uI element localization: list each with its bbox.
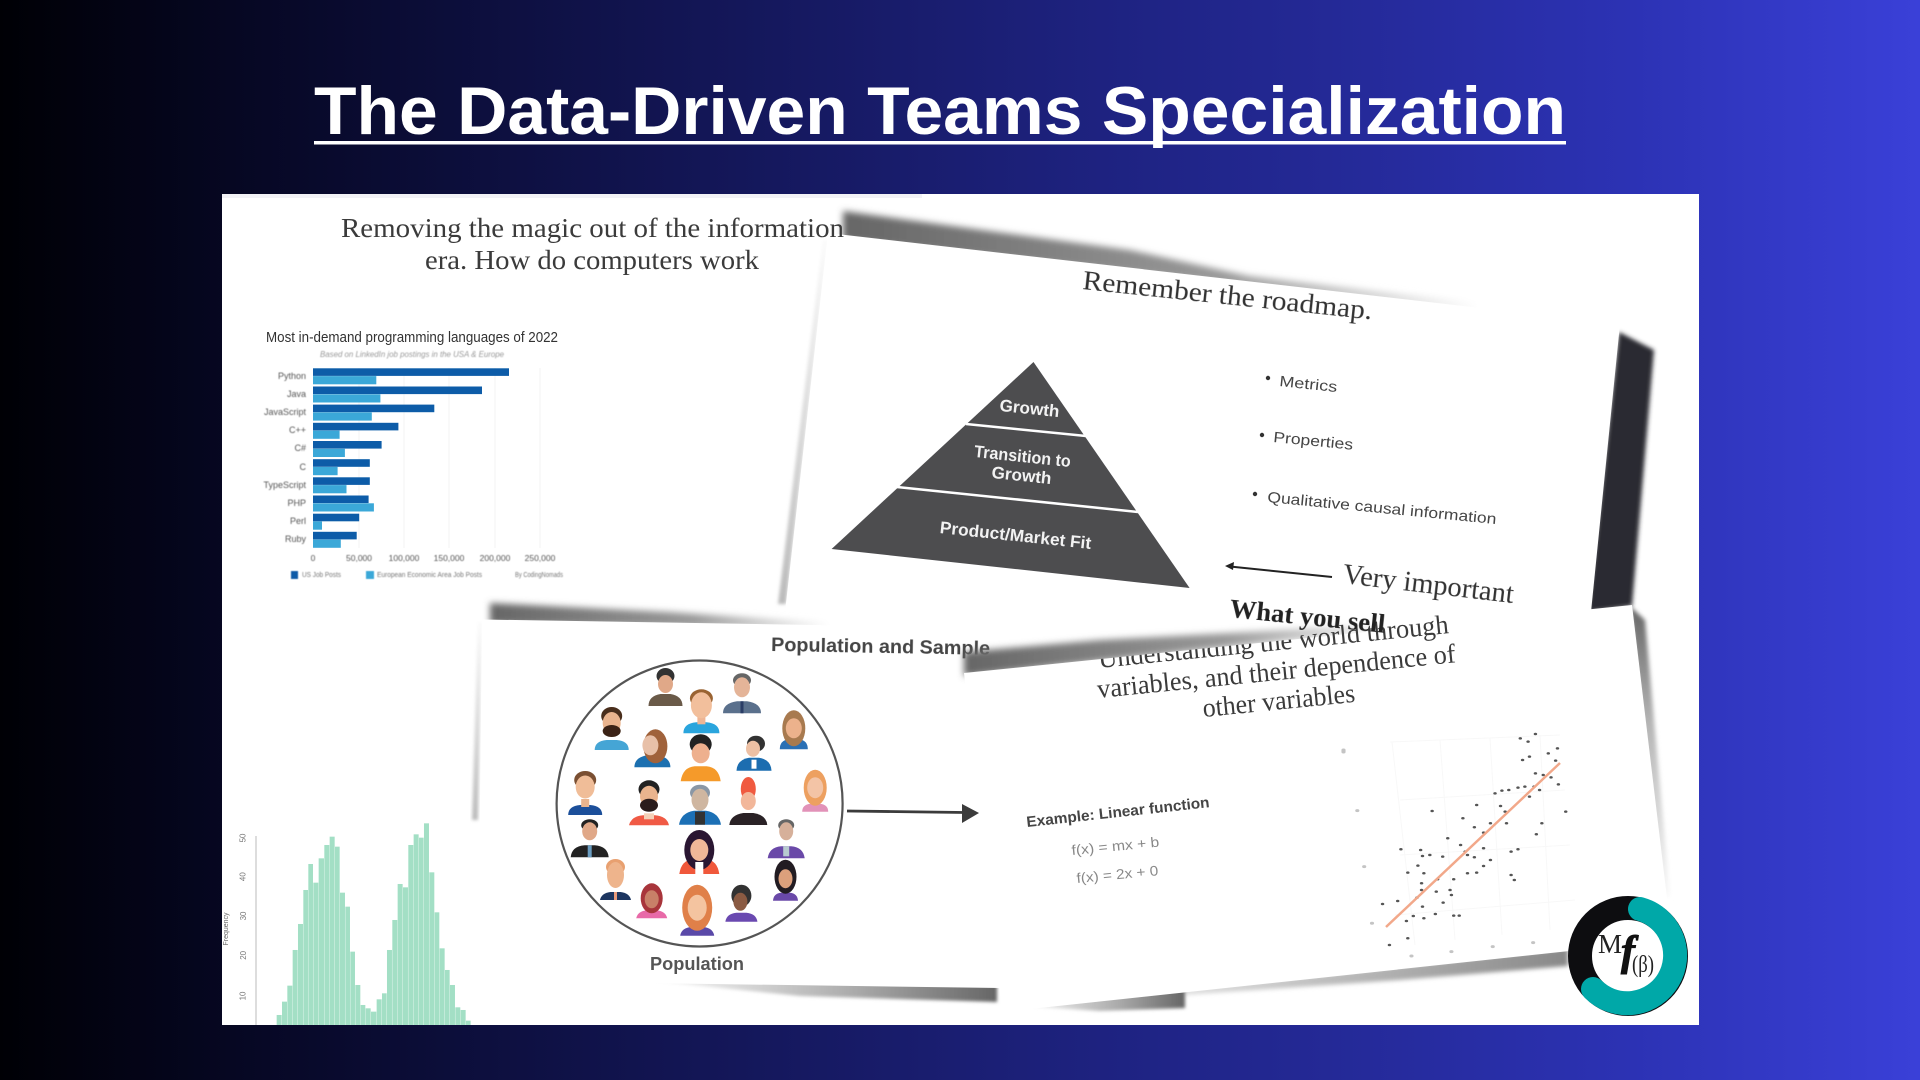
slide shadow: right	[1630, 606, 1670, 897]
heading: understanding the world: Understanding the world through	[1097, 609, 1450, 674]
heading: removing the magic: era. How do computers work	[425, 245, 760, 275]
title: The Data-Driven Teams Specialization	[314, 73, 1566, 149]
slide: linear function	[964, 594, 1672, 1012]
slide shadow: right	[1588, 332, 1654, 612]
slide shadow: top	[843, 211, 1478, 312]
language labels: TypeScript	[263, 480, 306, 490]
heading: understanding the world: other variables	[1201, 678, 1356, 723]
text: example linear function: Example: Linear function	[1026, 794, 1210, 831]
arrow: population to sample	[847, 804, 979, 823]
slide: roadmap	[832, 265, 1516, 610]
slide shadow: bottom	[642, 980, 997, 1002]
label: population: Population	[650, 954, 744, 974]
histogram chart: 50	[238, 833, 247, 842]
legend: By CodingNomads	[515, 572, 563, 579]
slide shadow: top	[490, 603, 830, 628]
text: example linear function	[1026, 794, 1210, 886]
pyramid diagram	[832, 362, 1190, 588]
logo: MF beta: M	[1598, 929, 1622, 959]
language labels: Python	[278, 371, 306, 381]
slide white sheet	[785, 233, 1620, 612]
heading: understanding the world	[1096, 615, 1456, 717]
histogram chart: 40	[238, 872, 247, 881]
histogram chart: 30	[239, 911, 248, 920]
axis labels	[311, 553, 556, 563]
text: example linear function: f(x) = 2x + 0	[1076, 862, 1159, 886]
pyramid diagram: Transition to	[973, 442, 1072, 471]
language labels: JavaScript	[264, 407, 306, 417]
histogram chart: Frequency	[223, 912, 230, 945]
slide shadow: top wedge	[964, 626, 1400, 676]
Europe bars	[313, 376, 380, 548]
axis labels: 100,000	[389, 553, 420, 563]
slide shadow: left	[472, 622, 482, 820]
slide shadow: bottom dark tail	[1020, 988, 1185, 1011]
language labels: Ruby	[285, 534, 306, 544]
heading: removing the magic: Removing the magic out of the information	[341, 213, 845, 243]
pyramid diagram: Product/Market Fit	[939, 518, 1092, 553]
scatter plot with regression line	[1344, 734, 1575, 956]
roadmap slide backing and shadows	[778, 211, 1654, 612]
heading: removing the magic	[341, 213, 845, 275]
slide shadow: left	[778, 240, 828, 604]
chart title: Most in-demand programming languages of 2022	[266, 329, 558, 346]
heading: understanding the world: variables, and their dependence of	[1096, 638, 1457, 704]
histogram chart: 10	[238, 991, 247, 1000]
language labels: PHP	[287, 498, 306, 508]
logo: MF beta	[1580, 908, 1676, 1004]
axis labels: 200,000	[480, 553, 511, 563]
bar chart: programming languages: Based on LinkedIn job postings in the USA & Europe	[320, 350, 505, 359]
arrow: very important	[1225, 562, 1332, 577]
bullet list	[1253, 373, 1497, 528]
legend: US Job Posts	[302, 572, 341, 579]
label: very important: Very important	[1341, 559, 1516, 610]
slide white sheet	[478, 620, 1000, 988]
histogram chart	[223, 823, 471, 1025]
language labels: Java	[287, 389, 306, 399]
text: example linear function: f(x) = mx + b	[1071, 834, 1160, 858]
language labels	[263, 371, 306, 544]
language labels: C#	[294, 443, 306, 453]
axis labels: 250,000	[525, 553, 556, 563]
slide shadow: bottom band	[1184, 948, 1568, 995]
language labels: Perl	[290, 516, 306, 526]
population circle	[557, 660, 843, 946]
bullet list: Qualitative causal information	[1267, 489, 1497, 528]
slide white sheet	[964, 605, 1672, 1012]
bullet list: Metrics	[1279, 373, 1338, 396]
language labels: C	[300, 462, 306, 472]
heading: population and sample: Population and Sample	[771, 635, 990, 660]
bar chart: programming languages	[263, 329, 563, 579]
US bars	[313, 368, 509, 539]
logo: MF beta: (β)	[1632, 952, 1654, 978]
legend: European Economic Area Job Posts	[377, 572, 482, 579]
axis labels: 0	[311, 553, 316, 563]
heading: remember the roadmap: Remember the roadmap.	[1081, 265, 1374, 325]
white collage panel	[222, 194, 1699, 1025]
heading: what you sell: What you sell	[1228, 594, 1387, 639]
legend	[291, 571, 563, 579]
logo: MF beta: f	[1621, 929, 1639, 975]
people avatars	[568, 668, 828, 936]
slide: how computers work	[263, 213, 845, 579]
axis labels: 150,000	[434, 553, 465, 563]
histogram chart: 20	[239, 950, 248, 960]
language labels: C++	[289, 425, 306, 435]
axis labels: 50,000	[346, 553, 372, 563]
pyramid diagram: Growth	[999, 396, 1060, 421]
bullet list: Properties	[1273, 429, 1354, 454]
pyramid diagram: Growth	[991, 463, 1052, 488]
slide: population and sample	[472, 603, 1000, 1002]
